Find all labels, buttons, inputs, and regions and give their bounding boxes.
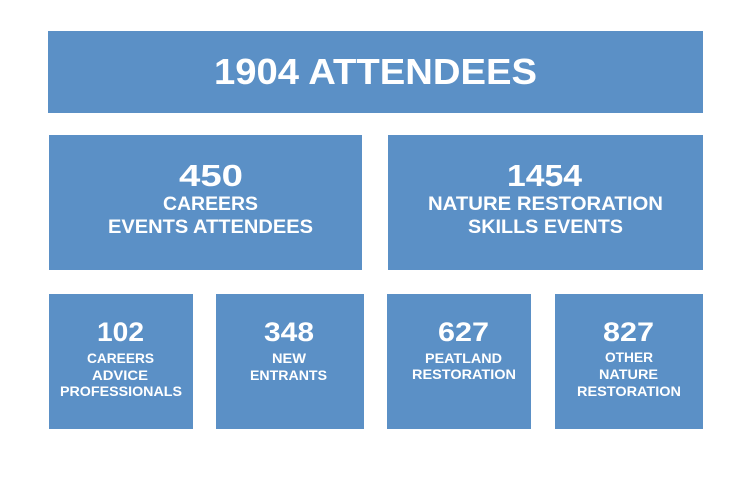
label: peatland restoration: RESTORATION <box>412 367 516 382</box>
label: peatland restoration <box>412 351 516 382</box>
label: nature restoration skills events: SKILLS EVENTS <box>468 217 623 238</box>
label: nature restoration skills events <box>428 194 663 238</box>
label: new entrants: NEW <box>272 351 306 366</box>
label: careers events attendees <box>108 194 313 238</box>
label: careers advice professionals: ADVICE <box>92 368 148 383</box>
label: nature restoration skills events: NATURE RESTORATION <box>428 194 663 215</box>
label: careers advice professionals <box>60 351 182 399</box>
label: other nature restoration: NATURE <box>599 367 658 382</box>
label: careers advice professionals: PROFESSIONALS <box>60 384 182 399</box>
panel: careers advice professionals <box>49 294 193 429</box>
label: new entrants: ENTRANTS <box>250 368 327 383</box>
panel: careers events <box>49 135 362 270</box>
panel: peatland restoration <box>387 294 531 429</box>
panel: other nature restoration <box>555 294 703 429</box>
number: 627: 627 <box>438 317 489 347</box>
panel: new entrants <box>216 294 364 429</box>
heading: 1904 attendees: 1904 ATTENDEES <box>214 51 537 92</box>
label: new entrants <box>250 351 327 383</box>
label: other nature restoration <box>577 350 681 399</box>
label: other nature restoration: RESTORATION <box>577 384 681 399</box>
label: peatland restoration: PEATLAND <box>425 351 502 366</box>
label: careers events attendees: EVENTS ATTENDEES <box>108 217 313 238</box>
number: 348: 348 <box>264 317 314 347</box>
panel: nature restoration skills events <box>388 135 703 270</box>
label: careers events attendees: CAREERS <box>163 194 258 215</box>
number: 827: 827 <box>603 317 654 347</box>
number: 450: 450 <box>179 158 243 193</box>
number: 1454: 1454 <box>507 158 583 193</box>
label: careers advice professionals: CAREERS <box>87 351 154 366</box>
number: 102: 102 <box>97 317 144 347</box>
label: other nature restoration: OTHER <box>605 350 653 365</box>
panel: total attendees <box>48 31 703 113</box>
